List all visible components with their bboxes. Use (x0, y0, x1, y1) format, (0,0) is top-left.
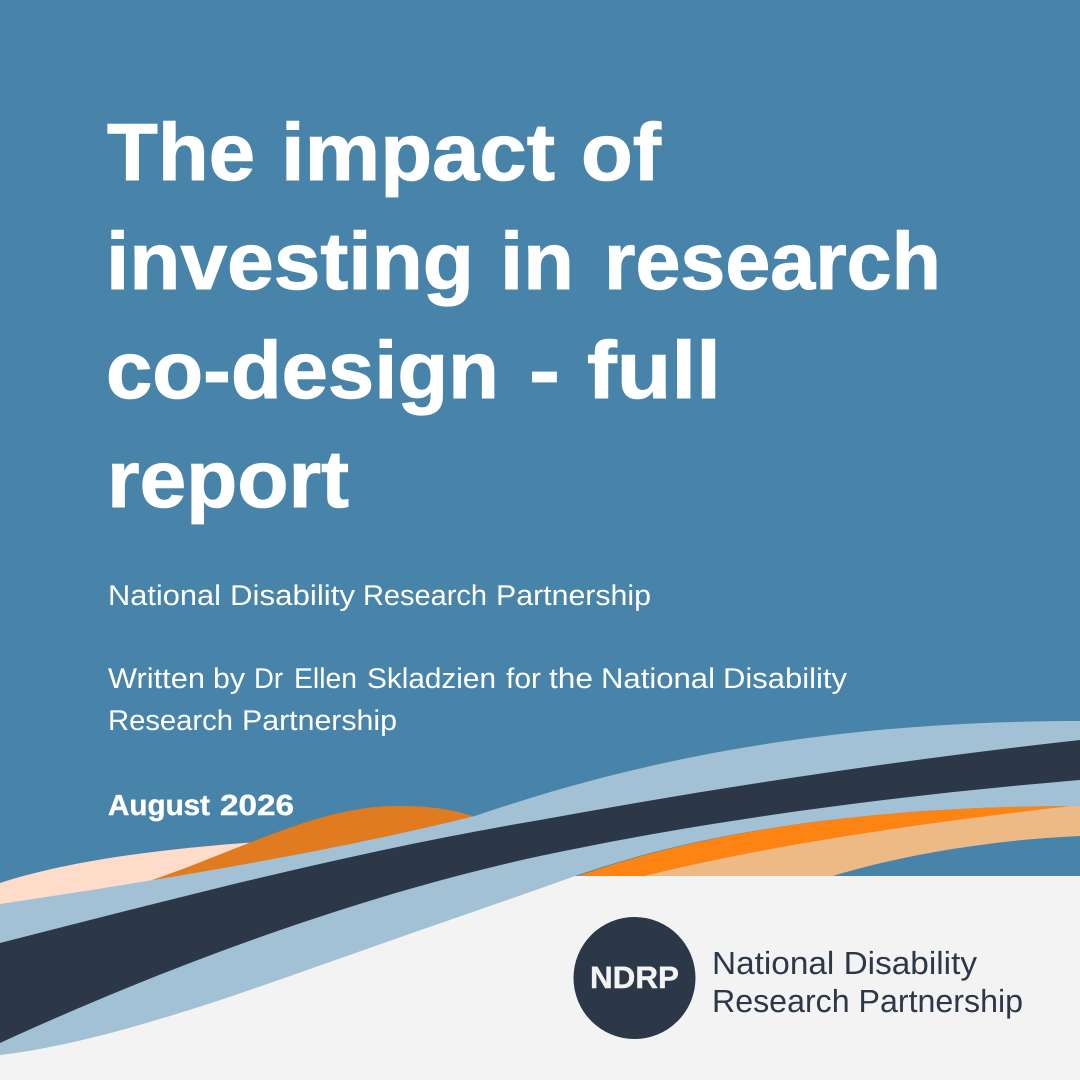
author credit: Skladzien (367, 663, 496, 695)
organisation name: National (108, 580, 221, 612)
title: report (107, 435, 349, 525)
wave: pale pink (0, 842, 300, 908)
author credit: Disability (723, 663, 848, 695)
author credit: Dr (254, 663, 283, 695)
title: impact (281, 108, 555, 198)
organisation name: Partnership (496, 580, 651, 612)
title: - (529, 326, 560, 416)
title: The (107, 108, 255, 198)
publication date: August (108, 790, 210, 822)
author credit: by (213, 663, 246, 695)
organisation name: Disability (230, 580, 356, 612)
title: co-design (106, 326, 499, 416)
title: of (581, 108, 662, 198)
logo badge (574, 917, 696, 1039)
wave: light blue (0, 721, 1080, 1055)
title: full (587, 326, 721, 416)
title: research (604, 217, 941, 307)
logo wordmark: Research Partnership (712, 983, 1023, 1019)
author credit: Written (108, 663, 205, 695)
author credit: for (506, 663, 542, 695)
logo initials: NDRP (590, 960, 679, 995)
wave: dark orange (152, 806, 475, 890)
wave: tan (632, 805, 1080, 879)
logo: NDRP (574, 917, 1023, 1039)
author credit (108, 663, 848, 737)
logo wordmark: National Disability (712, 945, 977, 981)
title (106, 108, 941, 525)
publication date: 2026 (220, 790, 294, 822)
wave: bright orange (575, 806, 1080, 880)
organisation name: Research (363, 580, 487, 612)
logo wordmark (712, 945, 1023, 1019)
author credit: Partnership (242, 705, 397, 737)
title: investing (106, 217, 474, 307)
title: in (500, 217, 574, 307)
wave: dark navy (0, 740, 1080, 1043)
author credit: Ellen (294, 663, 357, 695)
footer panel (0, 876, 1080, 1080)
author credit: National (601, 663, 715, 695)
author credit: Research (108, 705, 233, 737)
author credit: the (549, 663, 593, 695)
